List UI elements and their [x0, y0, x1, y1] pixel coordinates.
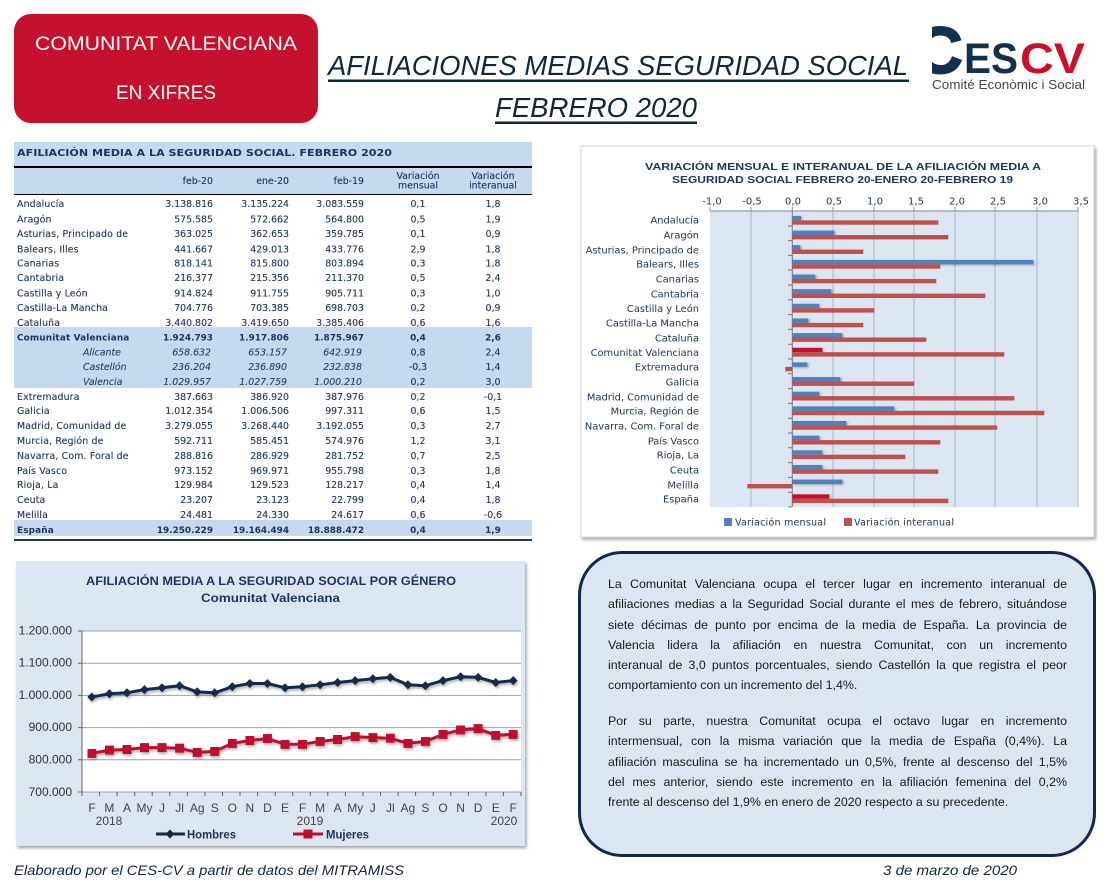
table rows: 441.667: [174, 244, 213, 256]
table rows: 3.279.055: [165, 421, 213, 432]
month labels: E: [281, 801, 289, 815]
footer: date: 3 de marzo de 2020: [883, 862, 1017, 878]
month labels: M: [315, 801, 325, 815]
month labels: F: [88, 801, 96, 815]
legend: [156, 830, 369, 842]
x axis labels: -0,5: [742, 196, 762, 208]
month labels: Jl: [175, 801, 184, 815]
table rows: 585.451: [250, 436, 289, 447]
table header: interanual: [469, 180, 517, 192]
table rows: 592.711: [174, 436, 213, 447]
table rows: 1,4: [486, 362, 500, 373]
table rows: 815.800: [250, 258, 289, 270]
table rows: 955.798: [325, 466, 364, 477]
legend: [724, 516, 954, 528]
table header: feb-20: [183, 176, 213, 187]
table rows: 215.356: [250, 273, 289, 284]
table rows: Valencia: [83, 377, 123, 388]
legend: Hombres: [187, 830, 236, 842]
red badge: Comunitat Valenciana en xifres: COMUNITAT VALENCIANA: [35, 34, 297, 55]
logo CES-CV: [932, 26, 1085, 89]
table rows: 236.890: [248, 362, 287, 373]
series: hombres: [92, 677, 513, 697]
category labels: País Vasco: [648, 436, 699, 448]
category labels: Canarias: [656, 274, 699, 286]
table rows: 3.192.055: [316, 421, 364, 432]
table rows: 0,5: [411, 273, 425, 284]
table header: Variación: [471, 171, 515, 182]
x axis labels: 2,5: [990, 196, 1006, 208]
table header: mensual: [398, 180, 438, 192]
y axis labels: 800.000: [29, 752, 72, 766]
table rows: 129.523: [250, 480, 289, 491]
table rows: Asturias, Principado de: [17, 229, 128, 240]
table header: [183, 171, 517, 192]
table rows: 23.207: [180, 495, 213, 506]
category labels: Ceuta: [670, 466, 699, 476]
table header: Variación: [396, 171, 440, 182]
table rows: 818.141: [174, 258, 213, 270]
table rows: 1,8: [486, 495, 500, 506]
table rows: 362.653: [250, 229, 289, 240]
table rows: 1,6: [486, 318, 500, 329]
logo CES-CV: C: [915, 13, 963, 87]
y axis labels: 1.100.000: [19, 656, 72, 670]
category labels: Navarra, Com. Foral de: [585, 422, 699, 432]
table rows: 216.377: [174, 273, 213, 284]
month labels: J: [370, 801, 376, 815]
table header: feb-19: [334, 176, 364, 187]
chart title: AFILIACIÓN MEDIA A LA SEGURIDAD SOCIAL POR GÉNERO: [86, 573, 456, 588]
table rows: 1.029.957: [163, 377, 211, 388]
table rows: 575.585: [174, 214, 213, 226]
table rows: Cantabria: [17, 273, 64, 284]
table rows: 129.984: [174, 480, 213, 491]
month labels: S: [211, 801, 219, 815]
month labels: 2020: [491, 814, 518, 828]
table rows: 0,2: [411, 392, 425, 403]
x axis labels: 1,5: [908, 196, 924, 208]
table rows: 211.370: [325, 273, 364, 284]
table rows: 3.419.650: [241, 318, 289, 329]
table rows: 703.385: [250, 303, 289, 314]
x axis labels: 1,0: [867, 196, 883, 208]
table rows: 0,2: [411, 377, 425, 388]
series: mujeres: [92, 729, 513, 753]
table rows: Castilla y León: [17, 288, 88, 300]
y axis labels: 1.000.000: [19, 688, 72, 702]
table rows: Madrid, Comunidad de: [17, 421, 126, 432]
table rows: 0,3: [411, 466, 425, 477]
logo CES-CV: CV: [1020, 35, 1085, 83]
table rows: -0,6: [484, 510, 502, 521]
category labels: Aragón: [664, 230, 699, 242]
table rows: 387.976: [325, 392, 364, 403]
table rows: 997.311: [325, 406, 364, 417]
table rows: 0,3: [411, 288, 425, 300]
panel: bar chart variación mensual e interanual: [581, 146, 1094, 537]
table rows: Aragón: [17, 214, 52, 226]
paragraph 1: siete décimas de punto por encima de la media de España. La provincia de: [608, 618, 1067, 632]
x axis labels: 2,0: [949, 196, 965, 208]
category labels: Melilla: [667, 480, 699, 492]
chart title: [86, 573, 456, 605]
category labels: Cataluña: [655, 334, 699, 344]
category labels: Cantabria: [651, 290, 699, 300]
month labels: F: [510, 801, 517, 815]
table rows: 23.123: [256, 495, 289, 506]
paragraph 2: afiliación masculina se ha incrementado un 0,5%, frente al descenso del 1,5%: [608, 755, 1067, 769]
table rows: 698.703: [325, 303, 364, 314]
month labels: J: [159, 801, 165, 815]
table rows: 22.799: [331, 495, 364, 506]
table rows: 658.632: [172, 348, 211, 358]
table rows: Canarias: [17, 258, 59, 270]
series: variación mensual: [792, 216, 1033, 499]
x axis labels: 3,5: [1073, 196, 1089, 208]
title: [326, 50, 909, 124]
month labels: D: [263, 801, 272, 815]
category labels: Comunitat Valenciana: [591, 348, 699, 359]
table rows: 19.250.229: [157, 526, 213, 536]
paragraph 1: Valencia lidera la afiliación en nuestra Comunitat, con un incremento: [608, 638, 1067, 652]
paragraph 1: La Comunitat Valenciana ocupa el tercer lugar en incremento interanual de: [608, 577, 1067, 591]
table rows: 0,9: [486, 229, 500, 240]
table rows: Murcia, Región de: [17, 436, 104, 447]
month labels: 2018: [96, 814, 123, 828]
table rows: 803.894: [325, 258, 364, 270]
category labels: Rioja, La: [657, 450, 699, 462]
paragraph 2: del mes anterior, siendo este incremento en la afiliación femenina del 0,2%: [608, 775, 1067, 789]
table rows: 3.385.406: [316, 318, 364, 329]
table rows: 433.776: [325, 244, 364, 256]
month labels: N: [245, 801, 254, 815]
category labels: España: [663, 494, 699, 506]
paragraph 2: Por su parte, nuestra Comunitat ocupa el octavo lugar en incremento: [608, 714, 1067, 728]
red badge: Comunitat Valenciana en xifres: [14, 14, 318, 123]
table rows: 281.752: [325, 451, 364, 462]
table rows: Cataluña: [17, 318, 60, 329]
table rows: 911.755: [250, 288, 289, 300]
table rows: 2,9: [411, 244, 425, 256]
table rows: País Vasco: [17, 466, 67, 477]
paragraph 1: interanual de 3,0 puntos porcentuales, siendo Castellón la que registra el peor: [608, 658, 1067, 672]
table rows: 3,1: [486, 436, 500, 447]
table rows: 0,8: [411, 348, 425, 358]
panel: line chart afiliación por género: [16, 561, 525, 846]
category labels: Castilla-La Mancha: [606, 318, 699, 330]
table rows: 1,8: [486, 258, 500, 270]
table rows: 564.800: [325, 214, 364, 226]
table rows: Melilla: [17, 510, 48, 521]
table rows: 1,9: [486, 214, 500, 226]
chart title: [645, 160, 1041, 186]
table rows: 2,4: [486, 273, 500, 284]
table rows: 0,6: [411, 510, 425, 521]
table rows: 18.888.472: [308, 526, 364, 536]
table rows: 2,6: [485, 334, 501, 344]
table rows: 0,2: [411, 303, 425, 314]
x axis labels: -1,0: [702, 196, 722, 208]
category labels: Extremadura: [635, 362, 699, 374]
table rows: 0,6: [411, 318, 425, 329]
table rows: 363.025: [174, 229, 213, 240]
x axis labels: 3,0: [1032, 196, 1048, 208]
category labels: Asturias, Principado de: [586, 246, 699, 256]
table rows: España: [17, 526, 54, 536]
paragraph 2: intermensual, con la misma variación que la media de España (0,4%). La: [608, 734, 1067, 748]
table rows: 1,8: [486, 466, 500, 477]
table rows: Castilla-La Mancha: [17, 303, 108, 314]
x axis labels: [702, 196, 1089, 208]
table rows: 232.838: [323, 362, 362, 373]
chart title: SEGURIDAD SOCIAL FEBRERO 20-ENERO 20-FEBRERO 19: [672, 174, 1013, 186]
table rows: 0,5: [411, 214, 425, 226]
table: afiliación media por comunidad: [14, 142, 532, 541]
table rows: Rioja, La: [17, 480, 58, 491]
month labels: D: [474, 801, 483, 815]
chart title: Comunitat Valenciana: [201, 591, 340, 605]
table rows: 0,4: [410, 526, 426, 536]
table rows: Extremadura: [17, 392, 80, 403]
month labels: N: [456, 801, 465, 815]
month labels: O: [438, 801, 448, 815]
month labels: [88, 801, 518, 828]
category labels: Balears, Illes: [636, 260, 699, 270]
table rows: 1,4: [486, 480, 500, 491]
paragraph 1: comportamiento con un incremento del 1,4%.: [608, 678, 857, 692]
table rows: Ceuta: [17, 495, 45, 506]
x axis labels: 0,0: [785, 196, 801, 208]
table rows: Andalucía: [17, 199, 64, 210]
table rows: 0,6: [411, 406, 425, 417]
table rows: 1.875.967: [314, 334, 364, 344]
title: FEBRERO 2020: [495, 92, 697, 123]
month labels: O: [228, 801, 237, 815]
table rows: 387.663: [174, 392, 213, 403]
table rows: 0,3: [411, 258, 425, 270]
table rows: 1.924.793: [163, 334, 213, 344]
month labels: Ag: [190, 801, 205, 815]
y axis labels: [19, 624, 72, 799]
table rows: 704.776: [174, 303, 213, 314]
table rows: Alicante: [82, 348, 121, 358]
legend: Variación interanual: [854, 516, 954, 528]
table rows: 24.330: [256, 510, 289, 521]
table rows: 1.027.759: [239, 377, 287, 388]
month labels: F: [299, 801, 306, 815]
table rows: 0,7: [411, 451, 425, 462]
category labels: Galicia: [666, 378, 699, 388]
table rows: 3.138.816: [165, 199, 213, 210]
table rows: 2,4: [486, 348, 500, 358]
table rows: Castellón: [83, 362, 127, 373]
table rows: [17, 199, 502, 536]
table rows: 288.816: [174, 451, 213, 462]
table rows: 969.971: [250, 466, 289, 477]
category labels: Murcia, Región de: [611, 406, 699, 418]
table rows: 572.662: [250, 214, 289, 226]
table rows: 0,4: [411, 495, 425, 506]
month labels: 2019: [297, 814, 324, 828]
title: AFILIACIONES MEDIAS SEGURIDAD SOCIAL: [326, 50, 908, 81]
table rows: 2,5: [486, 451, 500, 462]
table rows: 1.000.210: [314, 377, 362, 388]
table rows: 1.917.806: [239, 334, 289, 344]
table rows: 286.929: [250, 451, 289, 462]
table rows: 1,9: [485, 526, 501, 536]
x axis labels: 0,5: [826, 196, 842, 208]
month labels: My: [136, 801, 152, 815]
panel: commentary text: [578, 551, 1096, 857]
table rows: 128.217: [325, 480, 364, 491]
table rows: 905.711: [325, 288, 364, 300]
y axis labels: 1.200.000: [19, 624, 72, 638]
logo CES-CV: ES: [964, 35, 1018, 83]
month labels: E: [492, 801, 500, 815]
table rows: 1,8: [486, 244, 500, 256]
table rows: 0,3: [411, 421, 425, 432]
table rows: 236.204: [172, 362, 211, 373]
table title: AFILIACIÓN MEDIA A LA SEGURIDAD SOCIAL. FEBRERO 2020: [17, 147, 392, 159]
table rows: 574.976: [325, 436, 364, 447]
table rows: 642.919: [323, 348, 362, 358]
series: variación interanual: [747, 220, 1044, 503]
table rows: -0,1: [484, 392, 502, 403]
table rows: 1,5: [486, 406, 500, 417]
paragraph 1: [608, 577, 1067, 692]
table rows: 24.481: [180, 510, 213, 521]
table rows: Galicia: [17, 406, 50, 417]
month labels: My: [347, 801, 363, 815]
red badge: Comunitat Valenciana en xifres: EN XIFRES: [116, 83, 216, 104]
paragraph 2: [608, 714, 1067, 809]
table rows: -0,3: [409, 362, 427, 373]
month labels: A: [334, 801, 342, 815]
table rows: 1.012.354: [165, 406, 213, 417]
y axis labels: 700.000: [29, 785, 72, 799]
table rows: 429.013: [250, 244, 289, 256]
table rows: 653.157: [248, 348, 287, 358]
table rows: 3.083.559: [316, 199, 364, 210]
month labels: Jl: [386, 801, 395, 815]
table rows: 1,2: [411, 436, 425, 447]
table rows: 0,9: [486, 303, 500, 314]
table rows: 1,0: [486, 288, 500, 300]
category labels: Andalucía: [650, 214, 699, 226]
chart title: VARIACIÓN MENSUAL E INTERANUAL DE LA AFILIACIÓN MEDIA A: [645, 160, 1041, 173]
table header: ene-20: [256, 176, 289, 187]
table rows: 386.920: [250, 392, 289, 403]
table rows: 19.164.494: [233, 526, 289, 536]
footer: source: Elaborado por el CES-CV a partir de datos del MITRAMISS: [14, 862, 405, 878]
table rows: 24.617: [331, 510, 364, 521]
table rows: 914.824: [174, 288, 213, 300]
table rows: 3,0: [486, 377, 500, 388]
category labels: [585, 214, 699, 506]
month labels: M: [104, 801, 114, 815]
table rows: Navarra, Com. Foral de: [17, 451, 129, 462]
table rows: 973.152: [174, 466, 213, 477]
legend: Variación mensual: [735, 516, 826, 528]
table rows: 3.440.802: [165, 318, 213, 329]
table rows: 1,8: [486, 199, 500, 210]
paragraph 2: frente al descenso del 1,9% en enero de 2020 respecto a su precedente.: [608, 795, 1008, 809]
category labels: Madrid, Comunidad de: [587, 392, 699, 404]
table rows: Balears, Illes: [17, 244, 79, 256]
table rows: 2,7: [486, 421, 500, 432]
category labels: Castilla y León: [627, 303, 699, 315]
table rows: 359.785: [325, 229, 364, 240]
table rows: 0,4: [410, 334, 426, 344]
table rows: 1.006.506: [241, 406, 289, 417]
y axis labels: 900.000: [29, 720, 72, 734]
table rows: 3.135.224: [241, 199, 289, 210]
paragraph 1: afiliaciones medias a la Seguridad Social durante el mes de febrero, situándose: [608, 597, 1067, 611]
legend: Mujeres: [326, 830, 369, 842]
month labels: Ag: [401, 801, 415, 815]
table rows: 3.268.440: [241, 421, 289, 432]
table rows: 0,1: [411, 199, 425, 210]
table rows: 0,4: [411, 480, 425, 491]
month labels: A: [123, 801, 131, 815]
month labels: S: [421, 801, 429, 815]
table rows: Comunitat Valenciana: [17, 334, 129, 344]
logo CES-CV: Comité Econòmic i Social: [932, 77, 1085, 92]
table rows: 0,1: [411, 229, 425, 240]
